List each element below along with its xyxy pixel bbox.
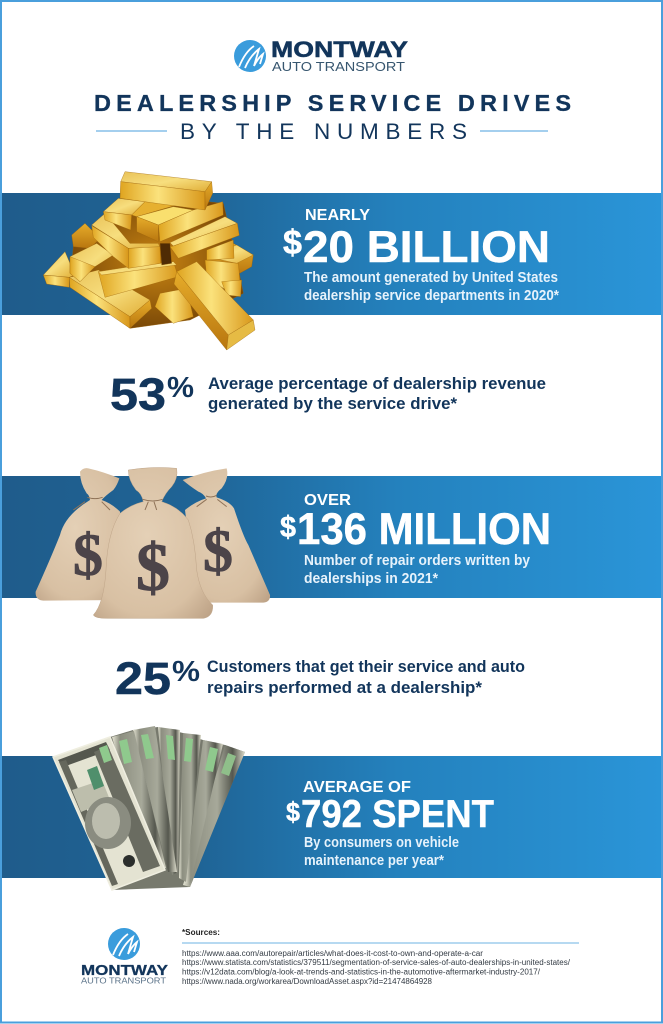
stat: 792 spent: $: [286, 797, 300, 827]
icon: gold bars: [43, 172, 255, 350]
label: average of: AVERAGE OF: [303, 779, 411, 796]
source links: https://v12data.com/blog/a-look-at-trends-and-statistics-in-the-automotive-aftermarket-industry-2017/: [182, 968, 541, 976]
logo tagline: AUTO TRANSPORT: [272, 59, 405, 74]
front bill: [53, 737, 165, 890]
logo wordmark: MONTWAY: [81, 963, 168, 979]
title: [94, 90, 571, 144]
stat: 53 percent: [110, 369, 546, 420]
title line 2: BY THE NUMBERS: [180, 119, 467, 144]
logo mark: [108, 928, 140, 960]
center bag: $: [136, 529, 170, 605]
logo tagline: AUTO TRANSPORT: [81, 976, 166, 986]
right bag: $: [203, 518, 233, 584]
stat: 20 billion: $: [283, 224, 302, 262]
stat: 25 percent: %: [172, 656, 200, 688]
logo mark: [234, 40, 266, 72]
stat: 136 million: $: [280, 511, 296, 544]
description: Customers that get their service and auto: [207, 657, 525, 676]
source links: [182, 949, 571, 986]
description: [208, 374, 546, 413]
icon: money bags: [36, 467, 270, 618]
footer logo: [81, 928, 168, 986]
title line 1: DEALERSHIP SERVICE DRIVES: [94, 90, 571, 116]
icon: fan of dollar bills: [53, 726, 245, 890]
stat: 53 percent: %: [167, 372, 194, 404]
panel: 136 million text: [280, 492, 551, 587]
description: dealership service departments in 2020*: [304, 288, 559, 304]
logo wordmark: MONTWAY: [271, 37, 408, 62]
stat: 53 percent: 53: [110, 369, 166, 420]
description: dealerships in 2021*: [304, 571, 438, 587]
panel: 136 million band: [2, 476, 661, 598]
stat: 25 percent: 25: [115, 653, 171, 704]
stat: 136 million: 136 MILLION: [297, 505, 551, 554]
panel: 20 billion text: [283, 207, 559, 304]
description: [207, 657, 525, 697]
description: By consumers on vehicle: [304, 835, 459, 851]
source links: https://www.statista.com/statistics/379511/segmentation-of-service-sales-of-auto-dealerships-in-united-states/: [182, 958, 571, 967]
description: maintenance per year*: [304, 853, 444, 869]
left bag: $: [73, 522, 103, 588]
description: [304, 270, 559, 304]
left bag: [36, 468, 123, 601]
panel: 792 band: [2, 756, 661, 878]
right bag: [183, 468, 270, 603]
panel: 20 billion band: [2, 193, 661, 315]
header logo: [234, 37, 408, 74]
description: repairs performed at a dealership*: [207, 678, 482, 697]
source links: https://www.aaa.com/autorepair/articles/what-does-it-cost-to-own-and-operate-a-car: [182, 949, 483, 958]
label: nearly: NEARLY: [305, 207, 371, 224]
description: generated by the service drive*: [208, 394, 457, 413]
panel: 792 text: [286, 779, 494, 869]
source links: https://www.nada.org/workarea/DownloadAsset.aspx?id=21474864928: [182, 977, 433, 986]
stat: 792 spent: 792 SPENT: [301, 793, 494, 836]
description: The amount generated by United States: [304, 270, 558, 286]
label: over: OVER: [304, 492, 351, 509]
sources: [182, 928, 579, 986]
stat: 25 percent: [115, 653, 525, 704]
description: Number of repair orders written by: [304, 553, 530, 569]
description: Average percentage of dealership revenue: [208, 374, 546, 393]
stat: 20 billion: 20 BILLION: [303, 223, 550, 272]
center bag: [93, 467, 213, 618]
description: [304, 835, 459, 869]
sources heading: *Sources:: [182, 928, 220, 937]
description: [304, 553, 530, 587]
